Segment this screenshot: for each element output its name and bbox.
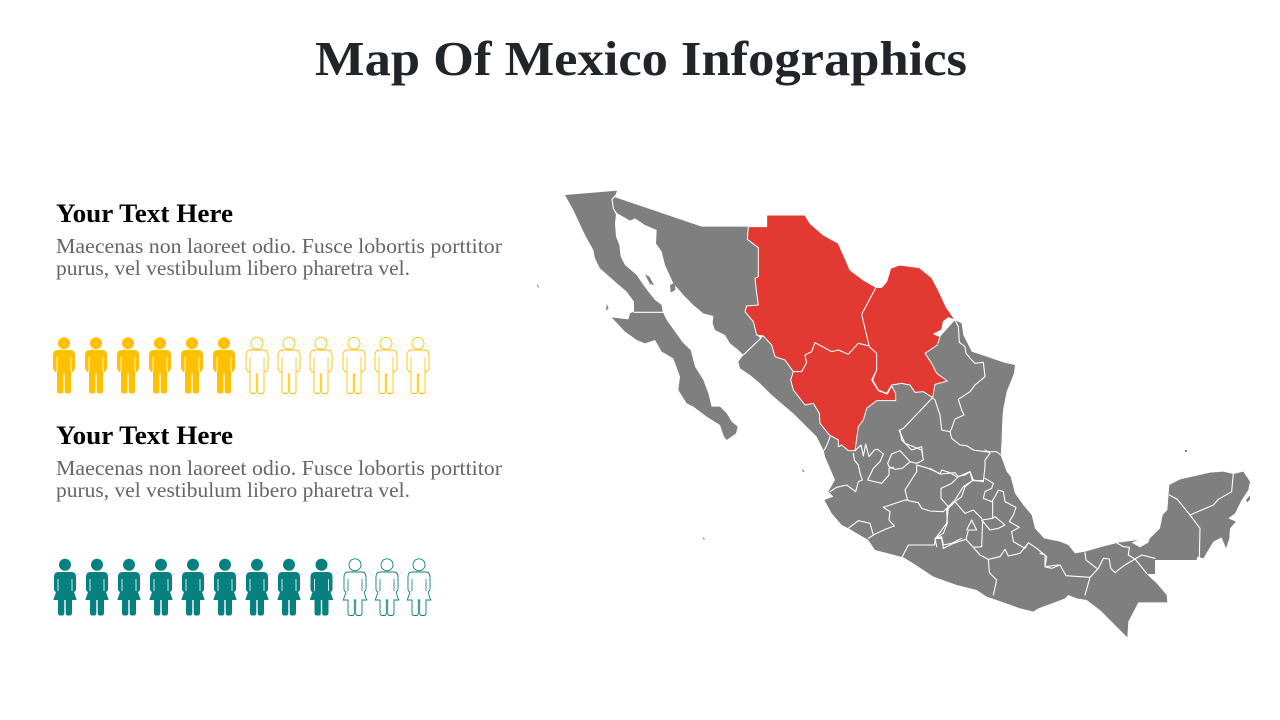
peninsula and Chiapas outline (1037, 472, 1250, 637)
Baja state line (634, 311, 663, 314)
pictogram: yellow men, 6 of 12 filled (53, 337, 429, 394)
map of Mexico (537, 191, 1250, 637)
panel: second text block (56, 421, 502, 502)
title: Map Of Mexico Infographics (315, 31, 967, 86)
small offshore specks (702, 450, 1187, 540)
red states (745, 215, 955, 451)
Chihuahua (745, 215, 876, 372)
northwest gray states (537, 191, 829, 472)
heading one: Your Text Here (56, 199, 233, 228)
southeast boundaries (1040, 473, 1233, 595)
Coahuila (862, 265, 955, 398)
body text two: Maecenas non laoreet odio. Fusce lobortis porttitor (56, 456, 502, 480)
central state boundaries (930, 450, 1058, 595)
northeast gray states base (860, 320, 1015, 455)
Sonora boundaries (612, 191, 761, 355)
southeast and Yucatan peninsula (1037, 472, 1250, 637)
panel: first text block (56, 199, 502, 280)
Laguna de Terminos (1132, 537, 1150, 547)
Sonora (612, 197, 761, 355)
Durango (791, 343, 896, 451)
body text two: purus, vel vestibulum libero pharetra vel. (56, 478, 410, 502)
pictogram: teal women, 9 of 12 filled (53, 559, 431, 616)
Cozumel (1246, 495, 1250, 502)
body text one: purus, vel vestibulum libero pharetra vel. (56, 256, 410, 280)
islands of the gulf (537, 274, 805, 472)
body text one: Maecenas non laoreet odio. Fusce lobortis porttitor (56, 234, 502, 258)
heading two: Your Text Here (56, 421, 233, 450)
southern Mexico base (823, 400, 1117, 612)
Sinaloa (738, 336, 829, 450)
west central state boundaries (824, 430, 983, 557)
Baja California peninsula (565, 191, 738, 440)
northeast state boundaries (900, 320, 1001, 455)
